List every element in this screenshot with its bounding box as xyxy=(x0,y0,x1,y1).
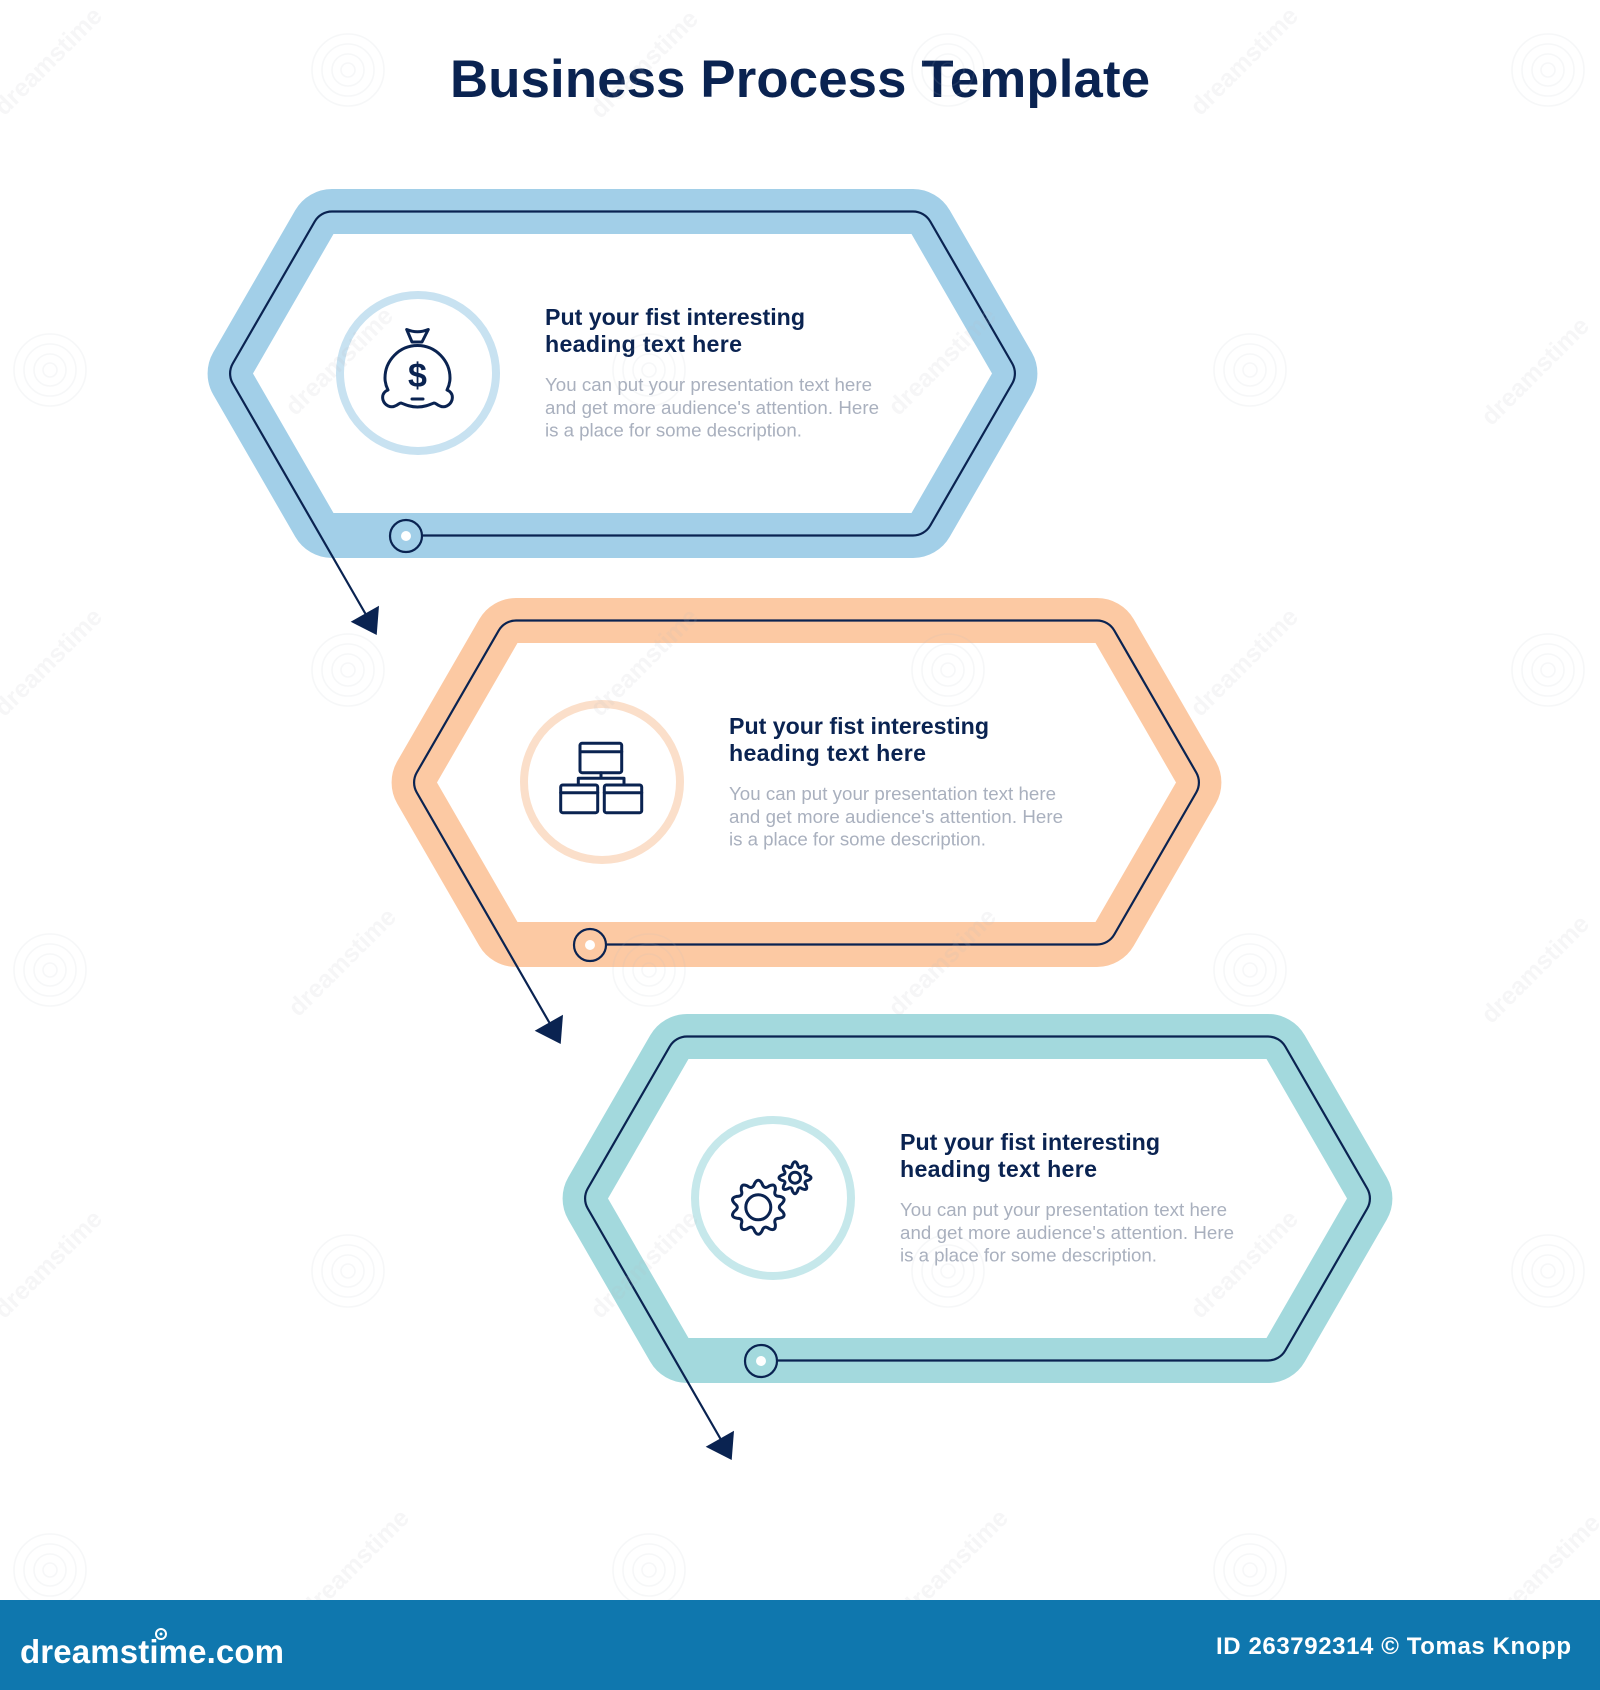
icon ring xyxy=(695,1120,851,1276)
connector line with arrow xyxy=(414,620,1199,1044)
text: dreamstime xyxy=(883,903,1002,1022)
text: dreamstime xyxy=(895,1504,1014,1623)
heading xyxy=(729,713,989,766)
description xyxy=(900,1199,1234,1266)
hexagon band: blue xyxy=(230,212,1015,536)
panel: step 3 xyxy=(585,1036,1370,1460)
description: You can put your presentation text here xyxy=(545,374,872,395)
description: You can put your presentation text here xyxy=(900,1199,1227,1220)
description: is a place for some description. xyxy=(729,828,986,850)
heading: Put your fist interesting xyxy=(545,304,805,330)
description: You can put your presentation text here xyxy=(729,783,1056,804)
text: dreamstime xyxy=(1185,1205,1304,1324)
description: and get more audience's attention. Here xyxy=(545,397,879,418)
icon: money bag xyxy=(383,330,452,407)
node marker xyxy=(574,929,606,961)
panel: step 2 xyxy=(414,620,1199,1044)
icon ring xyxy=(340,295,496,451)
footer credit: ID 263792314 © Tomas Knopp xyxy=(1216,1633,1571,1660)
title: Business Process Template xyxy=(450,50,1150,109)
text: dreamstime xyxy=(1476,312,1595,431)
heading: heading text here xyxy=(900,1156,1097,1182)
panel: step 1 xyxy=(230,212,1015,635)
connector line with arrow xyxy=(230,212,1015,635)
description xyxy=(729,783,1063,850)
text: dreamstime xyxy=(1185,2,1304,121)
icon: money bag: $ xyxy=(408,357,427,395)
heading xyxy=(545,304,805,357)
hexagon band: orange xyxy=(414,620,1199,944)
footer logo: dreamstime.com xyxy=(20,1633,284,1670)
text: dreamstime xyxy=(585,603,704,722)
description: is a place for some description. xyxy=(900,1244,1157,1266)
text: dreamstime xyxy=(883,302,1002,421)
heading: heading text here xyxy=(545,331,742,357)
heading: heading text here xyxy=(729,740,926,766)
footer bar xyxy=(0,1600,1600,1690)
text: dreamstime xyxy=(1476,910,1595,1029)
text: dreamstime xyxy=(296,1504,415,1623)
heading: Put your fist interesting xyxy=(729,713,989,739)
text: dreamstime xyxy=(280,302,399,421)
hexagon band: teal xyxy=(585,1036,1370,1360)
description xyxy=(545,374,879,440)
text: dreamstime xyxy=(1185,603,1304,722)
heading: Put your fist interesting xyxy=(900,1129,1160,1155)
text: dreamstime xyxy=(585,5,704,124)
description: and get more audience's attention. Here xyxy=(729,806,1063,827)
heading xyxy=(900,1129,1160,1182)
icon: hierarchy boxes xyxy=(561,743,642,813)
node marker xyxy=(745,1345,777,1377)
description: and get more audience's attention. Here xyxy=(900,1222,1234,1243)
connector line with arrow xyxy=(585,1036,1370,1460)
node marker xyxy=(390,520,422,552)
icon ring xyxy=(524,704,680,860)
text: dreamstime xyxy=(585,1205,704,1324)
icon: gears xyxy=(733,1162,811,1234)
text: dreamstime xyxy=(283,903,402,1022)
description: is a place for some description. xyxy=(545,420,802,440)
